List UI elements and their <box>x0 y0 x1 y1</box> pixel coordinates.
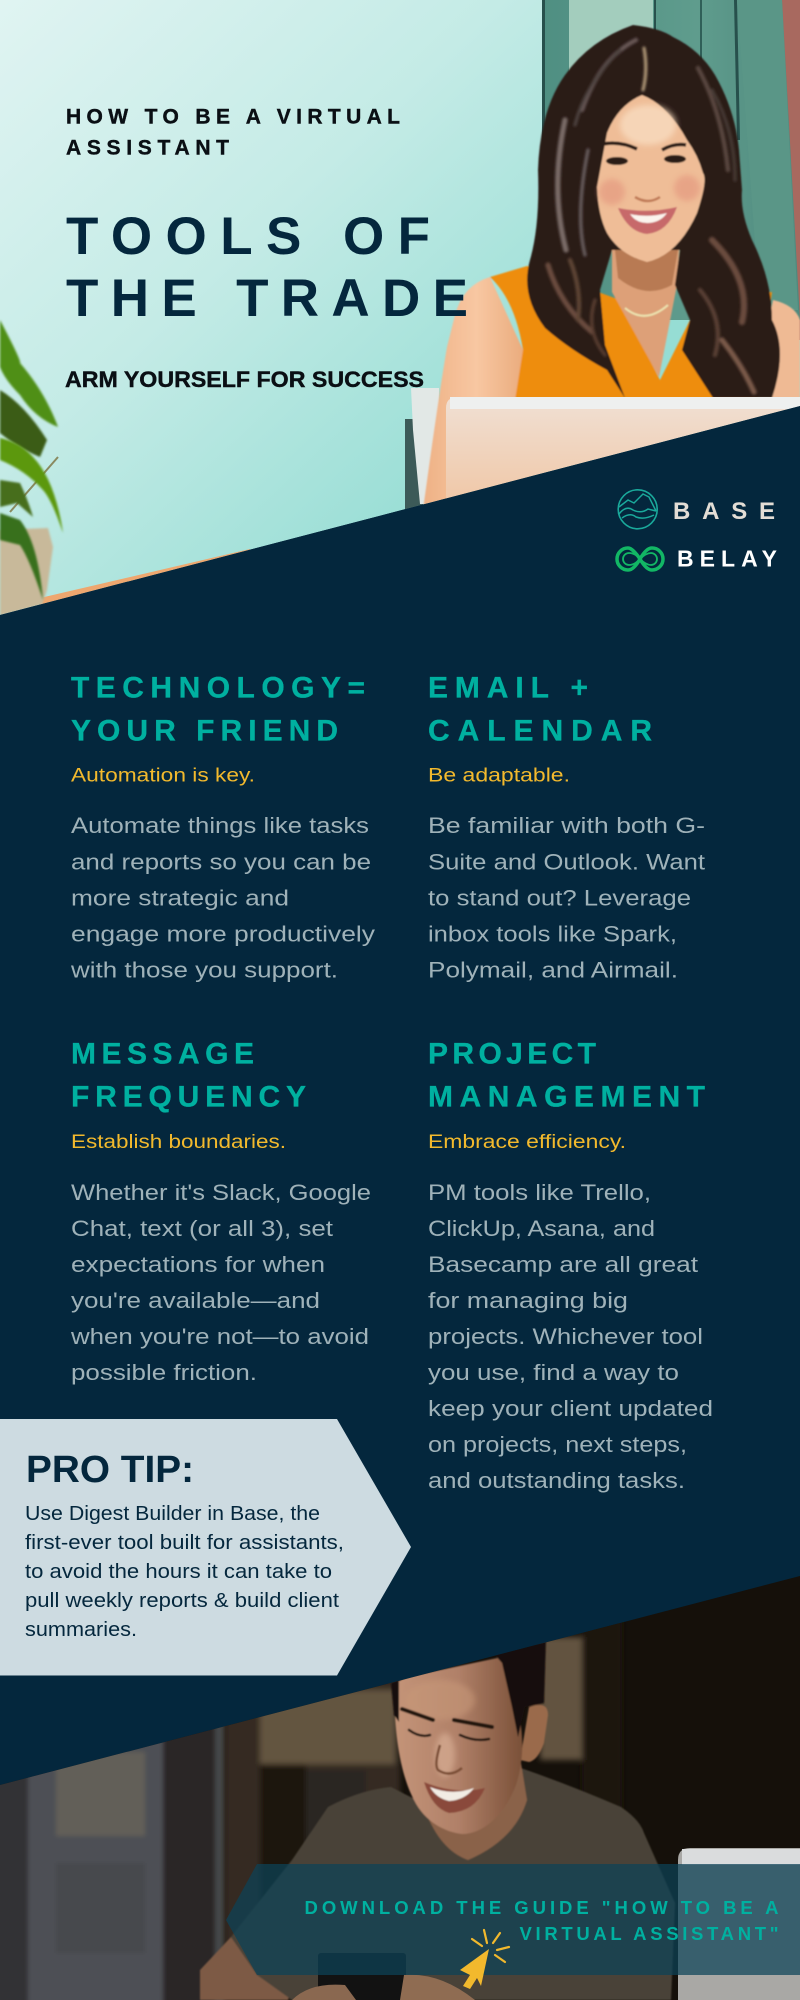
body text <box>70 813 375 982</box>
body text: PM tools like Trello, <box>428 1180 651 1205</box>
subheading: Be adaptable. <box>428 766 570 786</box>
face highlights <box>418 1682 476 1718</box>
hair highlights <box>548 40 754 392</box>
body text: and reports so you can be <box>71 850 371 874</box>
body text <box>428 1180 713 1493</box>
pro tip text: summaries. <box>25 1619 137 1641</box>
main title <box>66 207 468 328</box>
eyes <box>606 157 628 165</box>
logos <box>617 490 777 572</box>
body text: on projects, next steps, <box>428 1432 687 1457</box>
pro tip panel <box>0 1419 411 1676</box>
forehead and nose light <box>620 105 676 145</box>
body text: ClickUp, Asana, and <box>428 1216 655 1241</box>
heading <box>71 1038 306 1114</box>
cheeks <box>599 179 625 205</box>
heading: MESSAGE <box>71 1038 254 1070</box>
green curtains <box>542 0 800 320</box>
body text: Suite and Outlook. Want <box>428 850 705 874</box>
heading: MANAGEMENT <box>428 1080 705 1114</box>
logo: Belay <box>617 546 777 572</box>
small heading: HOW TO BE A VIRTUAL <box>66 106 400 128</box>
laptop <box>678 1848 800 2000</box>
pro tip heading: PRO TIP: <box>26 1449 194 1491</box>
phone and hands <box>292 1953 475 2000</box>
section: project management <box>428 1038 713 1493</box>
body text: engage more productively <box>71 922 375 946</box>
main title: THE TRADE <box>66 269 468 328</box>
leaves <box>0 320 58 427</box>
body text <box>70 1180 371 1385</box>
body text: more strategic and <box>71 886 289 910</box>
pro tip text: pull weekly reports & build client <box>25 1590 339 1612</box>
peach strip along diagonal <box>40 549 250 606</box>
chair <box>405 388 439 510</box>
body text: when you're not—to avoid <box>70 1324 369 1349</box>
body text: inbox tools like Spark, <box>428 922 677 946</box>
blurred back wall and frame <box>225 1600 622 2000</box>
left arm <box>423 277 530 510</box>
body text: keep your client updated <box>428 1396 713 1421</box>
download text: DOWNLOAD THE GUIDE "HOW TO BE A <box>304 1897 778 1918</box>
body text: Automate things like tasks <box>71 813 369 838</box>
main title: TOOLS OF <box>66 207 430 266</box>
neck <box>425 1763 527 1860</box>
section: technology <box>70 672 375 982</box>
body text: Basecamp are all great <box>428 1252 698 1277</box>
body text: Whether it's Slack, Google <box>71 1180 371 1205</box>
body text: expectations for when <box>71 1252 325 1277</box>
nose <box>436 1745 462 1774</box>
body text: for managing big <box>428 1288 628 1313</box>
body text <box>428 813 705 982</box>
download banner <box>226 1864 800 1989</box>
woman <box>423 25 800 510</box>
pot <box>0 528 53 616</box>
section: email and calendar <box>428 672 705 982</box>
section: message frequency <box>70 1038 371 1385</box>
t-shirt <box>231 1767 675 2000</box>
heading: FREQUENCY <box>71 1080 306 1114</box>
small heading <box>66 106 400 160</box>
body text: Chat, text (or all 3), set <box>71 1216 333 1241</box>
body text: projects. Whichever tool <box>428 1324 703 1349</box>
face <box>597 95 705 262</box>
subheading: Automation is key. <box>71 766 255 786</box>
heading: EMAIL + <box>428 672 588 704</box>
dark room background <box>0 1570 800 2000</box>
small heading: ASSISTANT <box>66 136 229 160</box>
body text: possible friction. <box>71 1360 257 1385</box>
arrow-shaped panel <box>0 1419 411 1676</box>
door and left interior <box>0 1726 226 2000</box>
banner shape <box>226 1864 800 1975</box>
body text: Be familiar with both G- <box>428 813 705 838</box>
download text: VIRTUAL ASSISTANT" <box>520 1923 778 1944</box>
necklace <box>625 305 668 316</box>
heading: TECHNOLOGY= <box>71 672 365 704</box>
brows and eyes <box>402 1709 492 1740</box>
neck and chest <box>612 240 680 377</box>
body text: to stand out? Leverage <box>428 886 691 910</box>
subheading: Embrace efficiency. <box>428 1132 626 1153</box>
logo: Belay: BELAY <box>677 546 777 572</box>
logo: Base <box>618 490 775 529</box>
heading: CALENDAR <box>428 714 652 748</box>
heading <box>428 672 652 748</box>
pro tip text: Use Digest Builder in Base, the <box>25 1503 320 1525</box>
body text: with those you support. <box>70 958 338 982</box>
plant and pot <box>0 320 63 616</box>
hero photo: woman at laptop against teal wall <box>0 0 800 620</box>
heading <box>428 1038 705 1114</box>
heading: PROJECT <box>428 1038 596 1070</box>
laptop <box>446 397 800 500</box>
teal wall background <box>0 0 800 620</box>
eyebrows <box>603 143 637 149</box>
pro tip text <box>25 1503 344 1641</box>
download text <box>304 1897 778 1944</box>
orange top <box>490 266 772 400</box>
hair mass <box>527 25 780 398</box>
heading: YOUR FRIEND <box>71 714 338 748</box>
mouth <box>424 1782 485 1813</box>
neck shadow <box>615 250 678 291</box>
brick wall strip <box>782 0 800 340</box>
stem <box>10 457 58 512</box>
smile <box>618 207 677 234</box>
ear <box>520 1705 548 1762</box>
man <box>200 1640 675 2000</box>
navy main panel <box>0 406 800 1785</box>
pro tip text: first-ever tool built for assistants, <box>25 1532 344 1554</box>
right arm <box>750 300 800 420</box>
heading <box>71 672 365 748</box>
subheading: Establish boundaries. <box>71 1132 286 1153</box>
tagline: ARM YOURSELF FOR SUCCESS <box>65 367 424 392</box>
body text: Polymail, and Airmail. <box>428 958 678 982</box>
face <box>395 1657 522 1834</box>
logo: Base: BASE <box>673 498 775 525</box>
forearm <box>200 1937 292 2000</box>
bottom photo: man looking at phone <box>0 1570 800 2000</box>
body text: you use, find a way to <box>428 1360 679 1385</box>
body text: and outstanding tasks. <box>428 1468 685 1493</box>
hair <box>391 1640 546 1737</box>
pro tip text: to avoid the hours it can take to <box>25 1561 332 1583</box>
body text: you're available—and <box>71 1288 320 1313</box>
icon: clicking cursor <box>460 1930 509 1989</box>
